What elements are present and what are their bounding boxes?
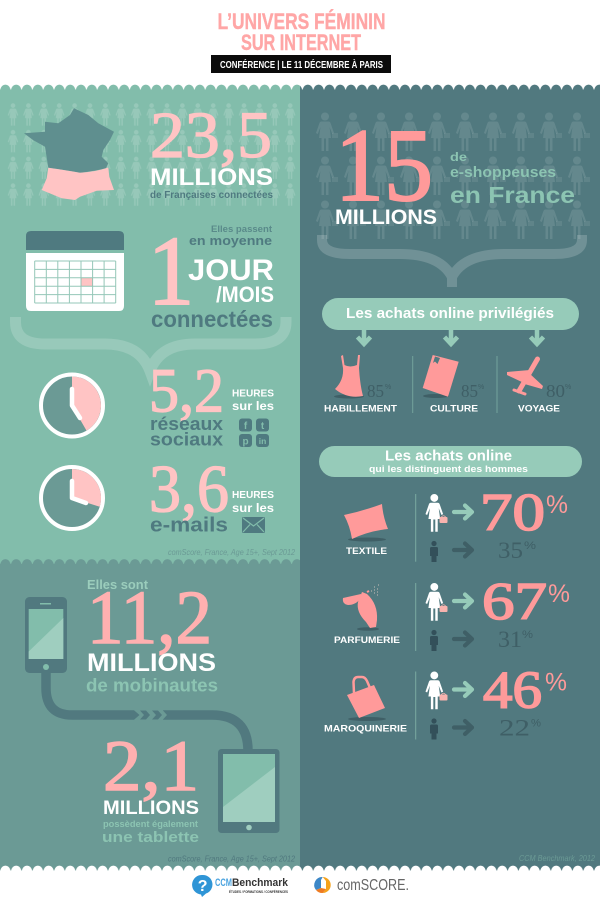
category: clothing: % — [385, 384, 391, 391]
stat: 1 day per month: Elles passent — [211, 224, 273, 235]
category: culture: CULTURE — [430, 404, 478, 414]
icons: social networks — [239, 418, 269, 448]
logo: CCM Benchmark: ? — [198, 878, 208, 895]
stat: 11,2 million mobile users: MILLIONS — [87, 649, 216, 677]
stat: 5,2 hours on social networks: 5,2 — [149, 358, 224, 426]
icons: social networks: f — [244, 421, 248, 432]
stat: 1 day per month: /MOIS — [216, 282, 274, 307]
logo: CCM Benchmark: Benchmark — [232, 877, 289, 889]
icon: map of France — [24, 108, 114, 200]
stat: 5,2 hours on social networks: réseaux — [150, 414, 223, 434]
stat: 11,2 million mobile users: Elles sont — [87, 578, 149, 592]
row: textile: % — [524, 540, 536, 552]
row: textile: 35 — [498, 538, 523, 563]
stat: 2,1 million tablet owners — [102, 726, 199, 846]
stat: 3,6 hours on e-mails: 3,6 — [149, 451, 229, 527]
row: textile: 70 — [480, 484, 545, 542]
title: SUR INTERNET — [241, 30, 361, 55]
stat: 5,2 hours on social networks: sur les — [232, 399, 274, 413]
category: clothing: 85 — [367, 381, 384, 401]
icons: social networks: t — [261, 421, 265, 432]
row: leather goods: % — [545, 668, 567, 696]
category: culture: % — [478, 384, 484, 391]
category: travel: % — [565, 384, 571, 391]
brace: left panel — [16, 317, 286, 371]
category: clothing — [324, 355, 398, 414]
stat: 15 million e-shoppers — [335, 108, 575, 229]
icon: tablet — [218, 749, 280, 833]
stat: 3,6 hours on e-mails: HEURES — [232, 490, 274, 501]
stat: 3,6 hours on e-mails — [149, 451, 274, 537]
stat: 23,5 millions — [150, 99, 273, 201]
stat: 5,2 hours on social networks — [149, 358, 274, 450]
stat: 15 million e-shoppers: MILLIONS — [335, 206, 437, 229]
category: culture: 85 — [461, 381, 478, 401]
logo: CCM Benchmark — [192, 875, 289, 897]
category: clothing: HABILLEMENT — [324, 404, 398, 414]
heading pill: preferred online purchases — [322, 298, 579, 330]
row: perfumery: 67 — [482, 573, 547, 631]
stat: 1 day per month: 1 — [148, 217, 194, 326]
panel: left bottom, mobile users — [0, 564, 300, 871]
stat: 15 million e-shoppers: de — [450, 150, 467, 164]
stat: 11,2 million mobile users — [86, 576, 218, 696]
row: textile — [344, 484, 568, 563]
title — [218, 9, 386, 55]
stat: 3,6 hours on e-mails: e-mails — [150, 515, 228, 537]
panel: right, e-shoppers — [300, 84, 600, 871]
stat: 15 million e-shoppers: e-shoppeuses — [450, 165, 556, 181]
panel: left top, connected women — [0, 84, 300, 564]
row: perfumery: % — [522, 629, 533, 641]
heading pill: purchases distinguishing from men — [319, 446, 582, 477]
stat: 1 day per month: connectées — [151, 306, 273, 332]
heading pill: preferred online purchases: Les achats online privilégiés — [346, 305, 554, 322]
icon: cable with arrows — [46, 670, 248, 751]
row: perfumery: 31 — [498, 627, 522, 652]
heading pill: purchases distinguishing from men: qui les distinguent des hommes — [369, 464, 528, 474]
stat: 23,5 millions: 23,5 — [150, 99, 272, 172]
icon: smartphone — [25, 597, 67, 673]
row: perfumery: PARFUMERIE — [334, 635, 400, 646]
category: culture — [423, 355, 484, 414]
stat: 5,2 hours on social networks: sociaux — [150, 430, 223, 450]
conference date banner: CONFÉRENCE | LE 11 DÉCEMBRE À PARIS — [220, 58, 383, 71]
logo: CCM Benchmark: ÉTUDES / FORMATIONS / CONFÉRENCES — [229, 889, 289, 894]
icon: calendar — [26, 231, 124, 311]
icons: social networks: in — [259, 436, 266, 446]
heading pill: purchases distinguishing from men: Les achats online — [385, 448, 512, 465]
category: travel: 80 — [546, 381, 565, 401]
source note: comScore lower: comScore, France, Age 15+, Sept 2012 — [168, 854, 295, 864]
stat: 11,2 million mobile users: de mobinautes — [86, 676, 218, 696]
arrows: down to categories — [358, 330, 544, 344]
conference date banner — [211, 55, 391, 73]
row: leather goods: 46 — [483, 662, 542, 720]
stat: 5,2 hours on social networks: HEURES — [232, 388, 274, 400]
logo: CCM Benchmark: CCM — [215, 877, 232, 889]
stat: 1 day per month: en moyenne — [189, 233, 272, 248]
stat: 2,1 million tablet owners: possèdent également — [103, 819, 199, 830]
row: leather goods: MAROQUINERIE — [324, 724, 407, 735]
stat: 11,2 million mobile users: 11,2 — [87, 576, 212, 660]
stat: 1 day per month — [148, 217, 274, 332]
stat: 23,5 millions: MILLIONS — [150, 164, 273, 191]
logo: comScore: comSCORE. — [337, 877, 409, 894]
row: textile: TEXTILE — [346, 546, 387, 557]
stat: 15 million e-shoppers: en France — [450, 182, 575, 208]
icon: clock 5,2 hours — [41, 374, 103, 436]
icon: clock 3,6 hours — [41, 467, 103, 529]
title: L’UNIVERS FÉMININ — [218, 9, 386, 34]
row: leather goods: % — [531, 718, 541, 730]
stat: 3,6 hours on e-mails: sur les — [232, 501, 274, 515]
source note: comScore: comScore, France, Age 15+, Sept 2012 — [168, 547, 295, 557]
logo: comScore — [314, 877, 409, 894]
brace: right panel — [322, 235, 582, 287]
stat: 2,1 million tablet owners: une tablette — [102, 829, 199, 846]
stat: 1 day per month: JOUR — [188, 254, 274, 287]
row: perfumery — [334, 573, 570, 652]
stat: 15 million e-shoppers: 15 — [335, 108, 433, 223]
stat: 23,5 millions: de Françaises connectées — [150, 189, 273, 201]
row: leather goods — [324, 662, 567, 740]
row: perfumery: % — [548, 580, 570, 608]
category: travel — [507, 359, 571, 414]
icons: social networks: p — [242, 436, 249, 448]
stat: 2,1 million tablet owners: MILLIONS — [103, 798, 199, 819]
row: leather goods: 22 — [499, 716, 530, 740]
stat: 2,1 million tablet owners: 2,1 — [103, 726, 199, 806]
row: textile: % — [546, 491, 568, 519]
category: travel: VOYAGE — [518, 404, 560, 414]
icon: envelope — [242, 517, 265, 533]
